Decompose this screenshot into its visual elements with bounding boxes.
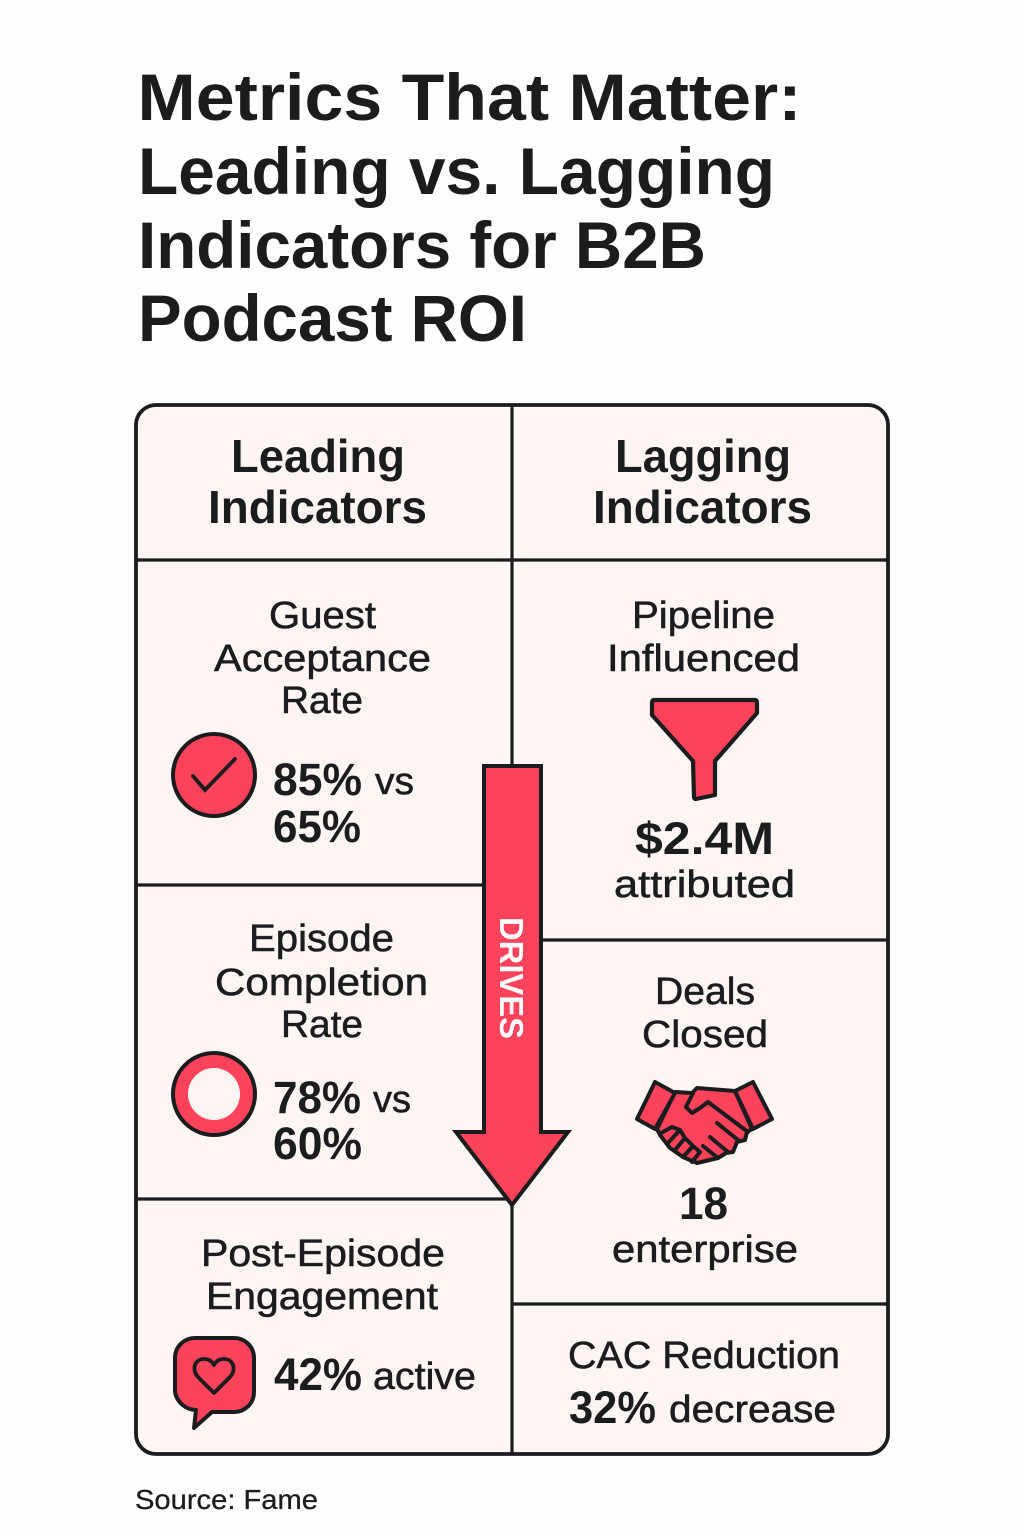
cell: CAC reduction: CAC Reduction — [568, 1335, 840, 1377]
cell: pipeline influenced: attributed — [614, 864, 795, 906]
cell: post-episode engagement: active — [373, 1356, 476, 1398]
cell: episode completion rate: Completion — [215, 962, 428, 1004]
source note: Source: Fame — [135, 1484, 318, 1515]
cell: pipeline influenced — [607, 595, 800, 906]
icon: funnel — [652, 700, 757, 799]
cell: post-episode engagement: 42% — [274, 1349, 362, 1400]
cell: pipeline influenced: Pipeline — [632, 595, 775, 637]
title — [138, 60, 802, 355]
title: Indicators for B2B — [138, 208, 706, 282]
icon: ring — [173, 1053, 255, 1135]
icon: heart speech bubble — [175, 1338, 254, 1428]
cell: guest acceptance rate: 65% — [273, 801, 361, 852]
panel: comparison table — [136, 405, 888, 1454]
cell: guest acceptance rate — [173, 595, 431, 852]
heading: leading indicators — [208, 430, 427, 533]
cell: post-episode engagement — [175, 1233, 476, 1428]
cell: deals closed: Closed — [642, 1014, 768, 1056]
cell: deals closed: 18 — [679, 1178, 728, 1229]
cell: CAC reduction — [568, 1335, 840, 1433]
title: Podcast ROI — [138, 281, 527, 355]
icon: handshake — [637, 1082, 772, 1163]
title: Leading vs. Lagging — [138, 134, 775, 208]
cell: deals closed — [612, 971, 798, 1271]
cell: guest acceptance rate: 85% — [273, 754, 362, 805]
heading: lagging indicators: Indicators — [593, 481, 812, 533]
title: Metrics That Matter: — [138, 60, 802, 134]
cell: CAC reduction: 32% — [569, 1382, 656, 1433]
cell: pipeline influenced: Influenced — [607, 638, 800, 680]
cell: guest acceptance rate: Guest — [269, 595, 376, 637]
cell: post-episode engagement: Post-Episode — [201, 1233, 445, 1275]
cell: guest acceptance rate: Acceptance — [214, 638, 431, 680]
cell: episode completion rate: 60% — [273, 1118, 362, 1169]
arrow: drives — [456, 766, 568, 1205]
cell: episode completion rate: Episode — [249, 918, 394, 960]
cell: episode completion rate: vs — [373, 1079, 411, 1121]
cell: CAC reduction: decrease — [669, 1389, 836, 1431]
heading: leading indicators: Leading — [231, 430, 405, 482]
cell: episode completion rate: 78% — [273, 1072, 361, 1123]
heading: lagging indicators — [593, 430, 812, 533]
arrow: drives: DRIVES — [493, 917, 530, 1039]
cell: episode completion rate — [173, 918, 428, 1169]
heading: leading indicators: Indicators — [208, 481, 427, 533]
cell: pipeline influenced: $2.4M — [635, 813, 774, 864]
cell: guest acceptance rate: vs — [375, 761, 414, 803]
heading: lagging indicators: Lagging — [615, 430, 791, 482]
cell: guest acceptance rate: Rate — [281, 680, 363, 722]
cell: deals closed: enterprise — [612, 1229, 798, 1271]
cell: episode completion rate: Rate — [281, 1004, 363, 1046]
icon: check circle — [173, 734, 255, 816]
cell: deals closed: Deals — [655, 971, 755, 1013]
cell: post-episode engagement: Engagement — [206, 1276, 438, 1318]
